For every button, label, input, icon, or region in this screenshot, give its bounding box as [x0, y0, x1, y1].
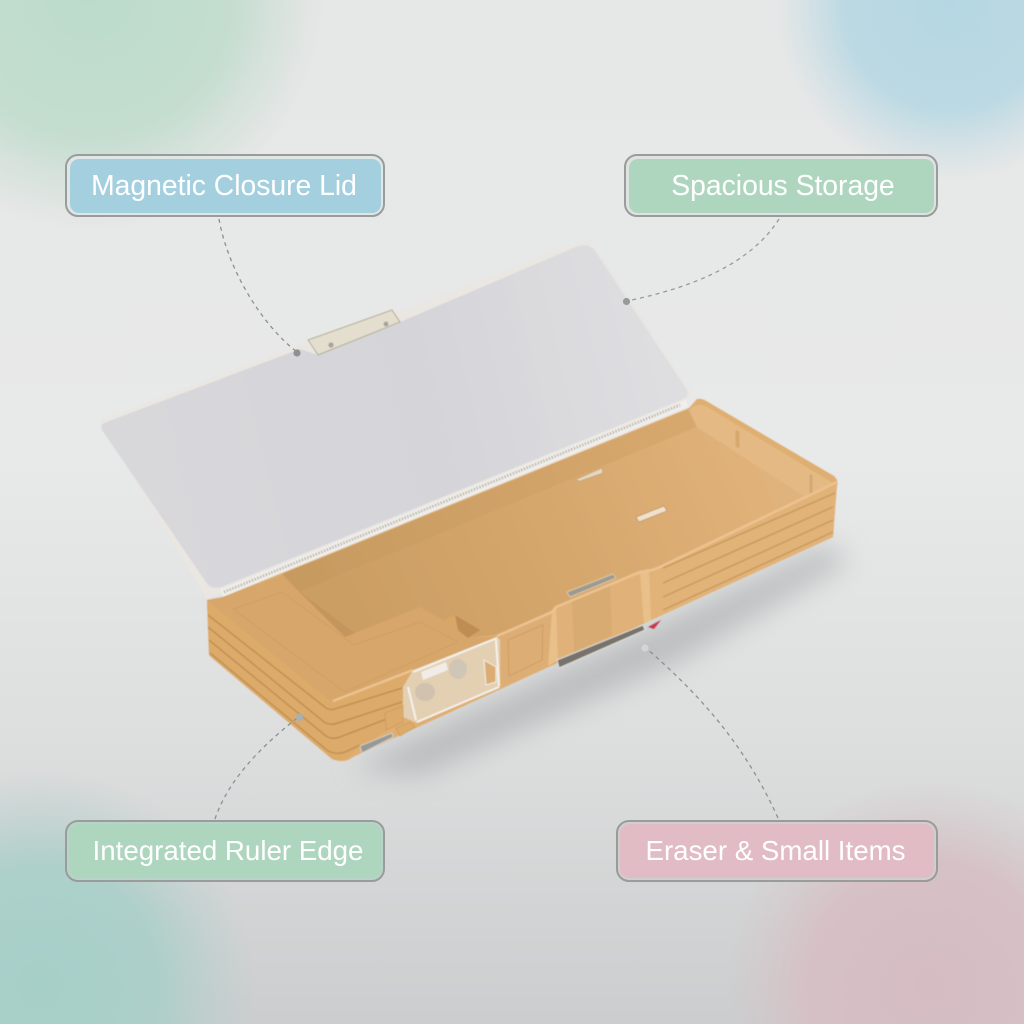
small metal clip [360, 733, 393, 753]
callout connector: lid [219, 219, 301, 357]
vertical wall joints [548, 569, 651, 666]
callout connector: storage [623, 219, 779, 305]
left side face [207, 600, 413, 760]
steel slot in floor [567, 574, 616, 597]
top surface with L-shaped compartment [207, 575, 497, 700]
open lid [99, 242, 691, 598]
label: Eraser & Small Items: Eraser & Small Items [645, 835, 906, 866]
front wall right section [647, 482, 837, 622]
label: Spacious Storage [625, 155, 937, 216]
label: Spacious Storage: Spacious Storage [671, 169, 895, 201]
label: Eraser & Small Items [617, 821, 937, 881]
label: Magnetic Closure Lid: Magnetic Closure Lid [91, 169, 357, 201]
label: Integrated Ruler Edge: Integrated Ruler Edge [93, 835, 363, 866]
compartment embossed outline [233, 592, 458, 692]
callout connector: eraser [641, 644, 778, 818]
magnetic clasp plate [308, 310, 400, 355]
metal ruler strip [557, 625, 645, 668]
storage floor [300, 427, 805, 638]
clear acrylic window [403, 637, 500, 723]
rectangular slot [636, 506, 667, 522]
product shadow [350, 545, 850, 775]
right end wall [689, 405, 833, 497]
small back notch [575, 468, 603, 481]
label: Integrated Ruler Edge [66, 821, 384, 881]
red accent [648, 620, 661, 629]
right side ridges [663, 493, 835, 610]
small square notch [443, 615, 480, 638]
front edge rim highlight [333, 482, 837, 701]
callout connector: ruler [215, 714, 303, 819]
front wall panel left [500, 612, 552, 687]
corner tabs [385, 706, 415, 736]
label: Magnetic Closure Lid [66, 155, 384, 216]
pencil case illustration [99, 242, 838, 761]
case body silhouette [207, 399, 838, 761]
wall ribs [735, 429, 813, 495]
recess side wall [282, 575, 355, 637]
front wall centre panel [555, 572, 644, 660]
interior back wall [282, 409, 697, 592]
left side ridges [208, 615, 402, 753]
